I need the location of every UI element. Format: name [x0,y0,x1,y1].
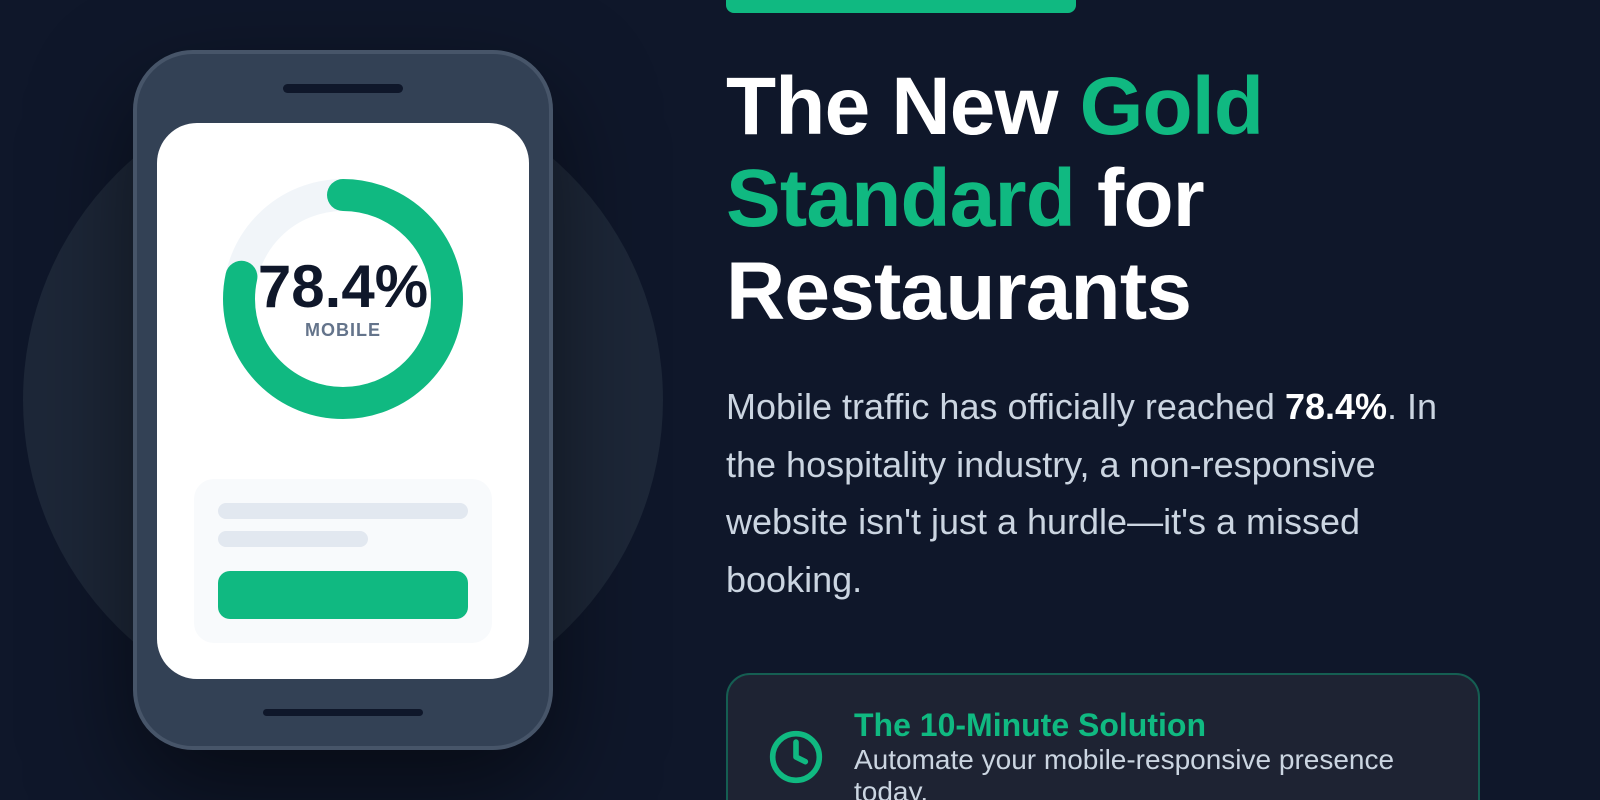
phone mockup [133,50,553,750]
top accent badge [726,0,1076,13]
body paragraph: Mobile traffic has officially reached 78.4%. In the hospitality industry, a non-responsive website isn't just a hurdle—it's a missed booking. [726,386,1437,600]
donut chart: 78.4% mobile [223,179,463,419]
phone screen [157,123,529,679]
placeholder line long [218,503,468,519]
phone speaker notch [283,84,403,93]
title: Restaurants [726,246,1191,337]
placeholder line short [218,531,368,547]
callout heading: The 10-Minute Solution [854,707,1206,743]
donut ring [223,179,463,419]
icon: clock [770,730,822,784]
title [726,61,1263,337]
background circle [23,80,663,720]
booking button [218,571,468,619]
mock booking card [194,479,492,643]
donut label: MOBILE [305,320,381,340]
title: The New Gold [726,61,1263,152]
donut value: 78.4% [258,253,428,320]
phone home bar [263,709,423,716]
solution callout [726,673,1480,800]
title: Standard for [726,153,1204,244]
